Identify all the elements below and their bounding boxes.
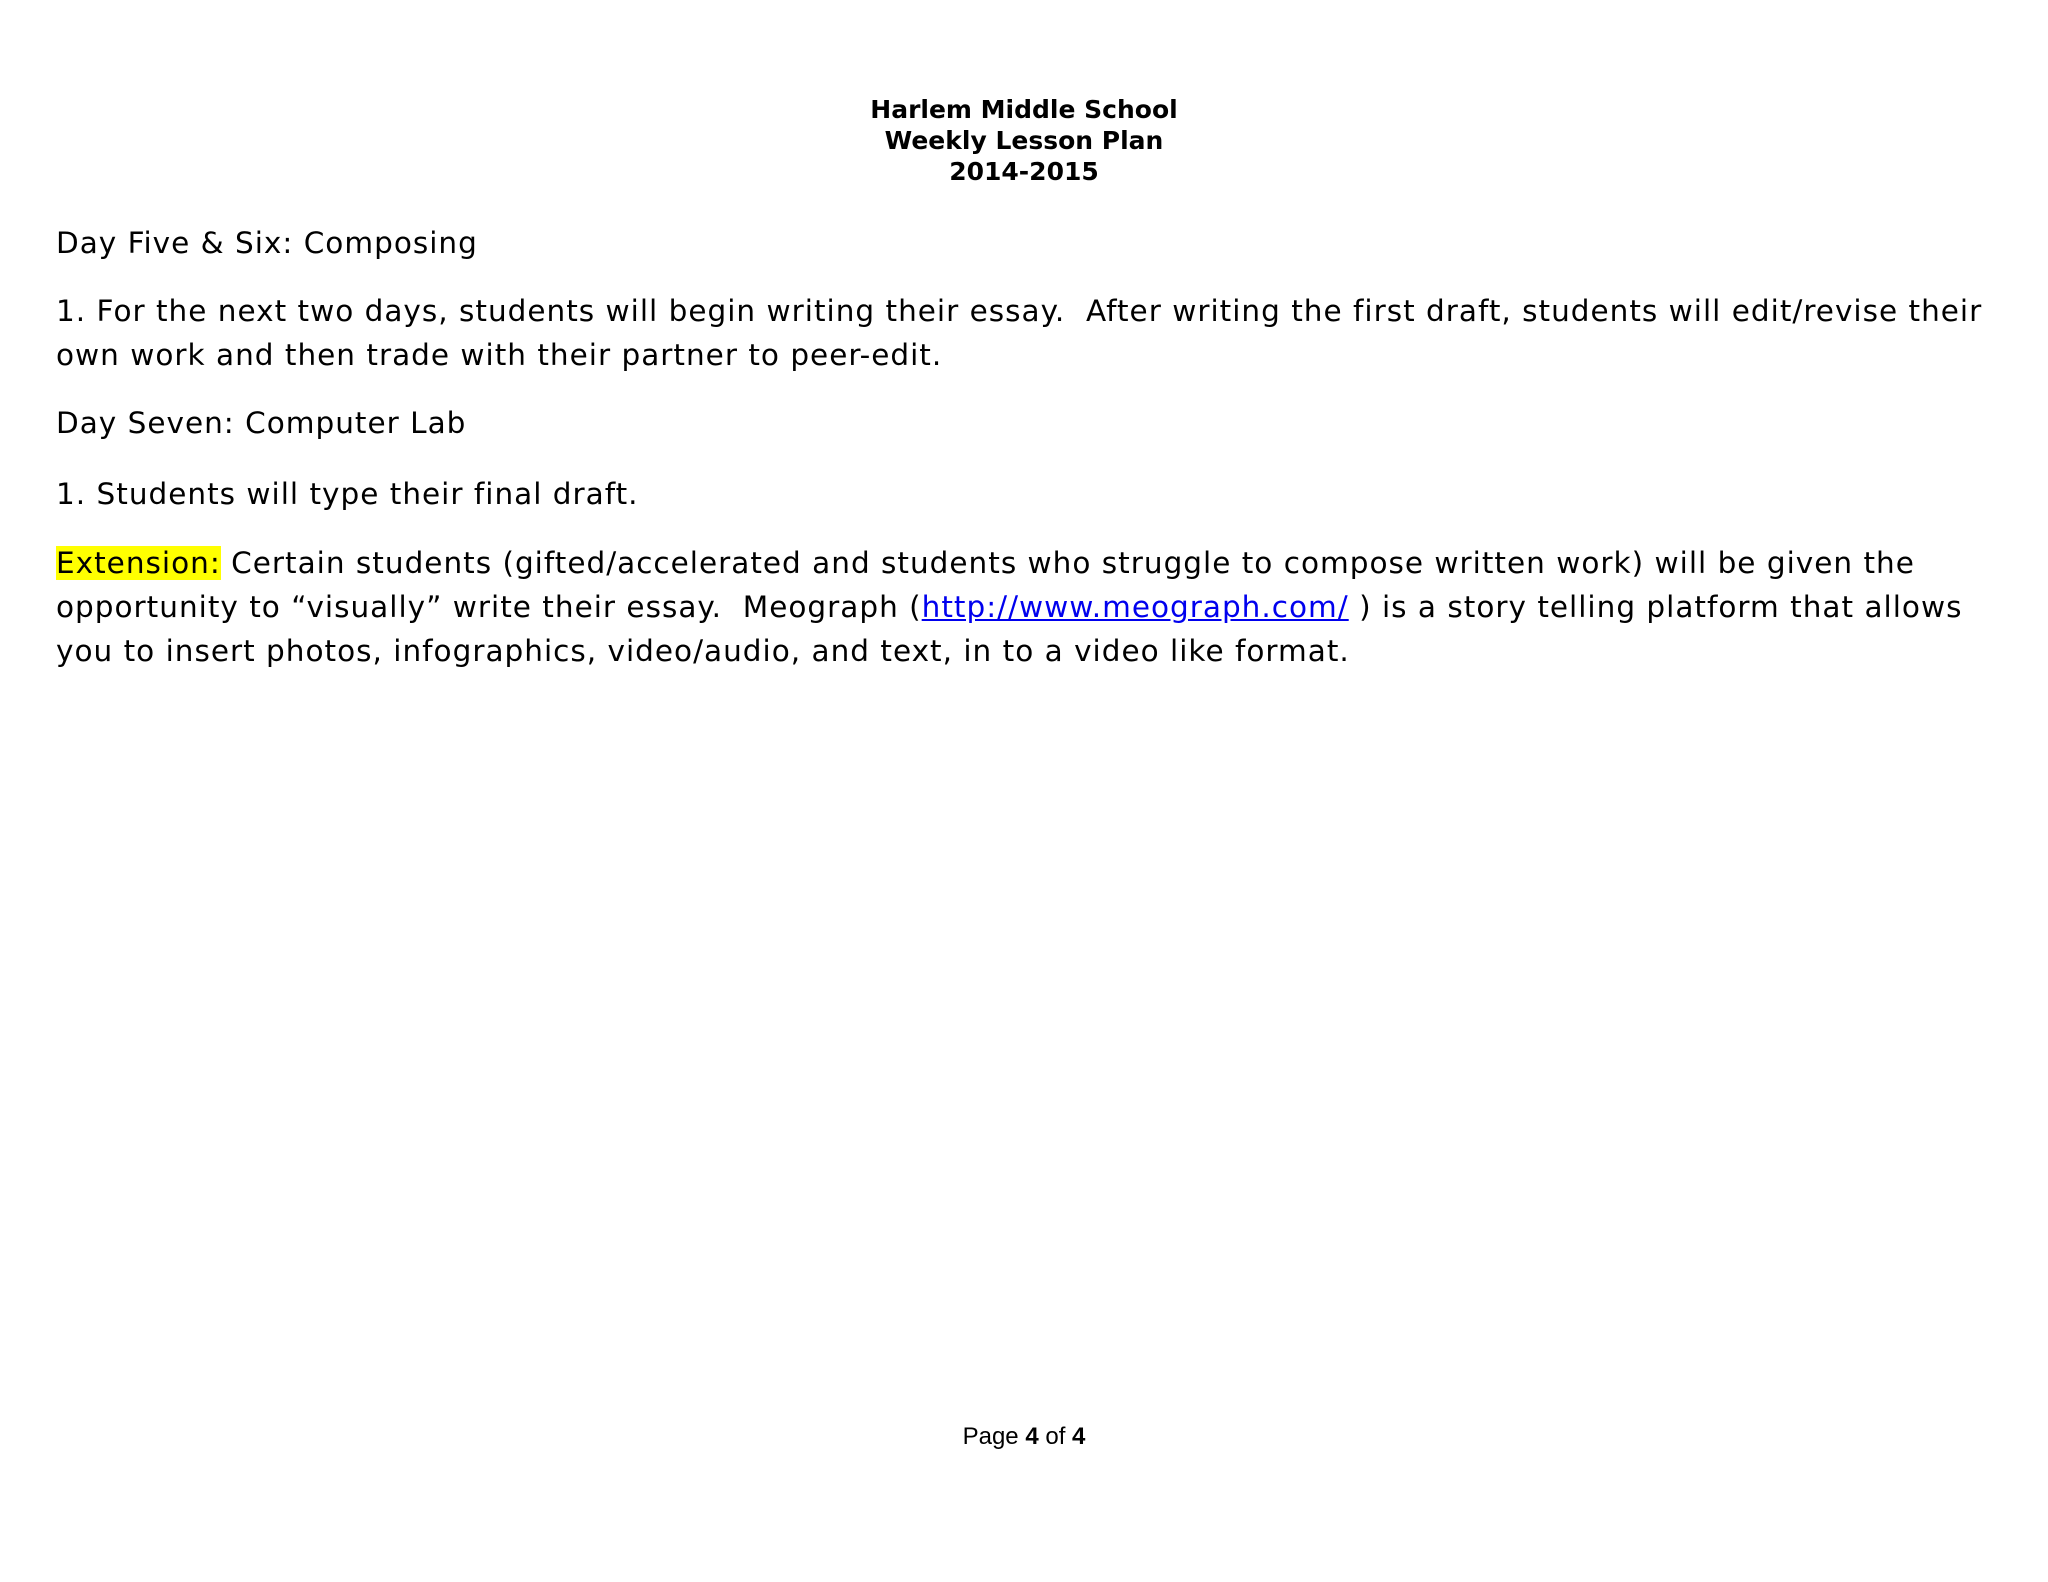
text block: extension: opportunity to “visually” write their essay. Meograph (http://www.meograph.com/ ) is a story telling platform that allows	[56, 590, 1962, 624]
text block: composing instructions	[56, 294, 1982, 372]
text block: extension	[56, 546, 1962, 668]
title	[870, 95, 1178, 186]
heading: day five & six: Day Five & Six: Composing	[56, 226, 478, 260]
heading: day seven: Day Seven: Computer Lab	[56, 406, 466, 440]
text block: extension: you to insert photos, infographics, video/audio, and text, in to a video like format.	[56, 634, 1350, 668]
text block: composing instructions: own work and then trade with their partner to peer-edit.	[56, 338, 942, 372]
footer: page number: Page 4 of 4	[963, 1423, 1085, 1450]
title: 2014-2015	[949, 157, 1099, 186]
title: Weekly Lesson Plan	[885, 126, 1163, 155]
text block: computer lab: 1. Students will type their final draft.	[56, 477, 639, 511]
text block: composing instructions: 1. For the next two days, students will begin writing their essay. After writing the first draft, students will edit/revise their	[56, 294, 1982, 328]
title: Harlem Middle School	[870, 95, 1178, 124]
text block: extension: Extension: Certain students (gifted/accelerated and students who struggle to compose written work) will be given the	[56, 546, 1915, 580]
